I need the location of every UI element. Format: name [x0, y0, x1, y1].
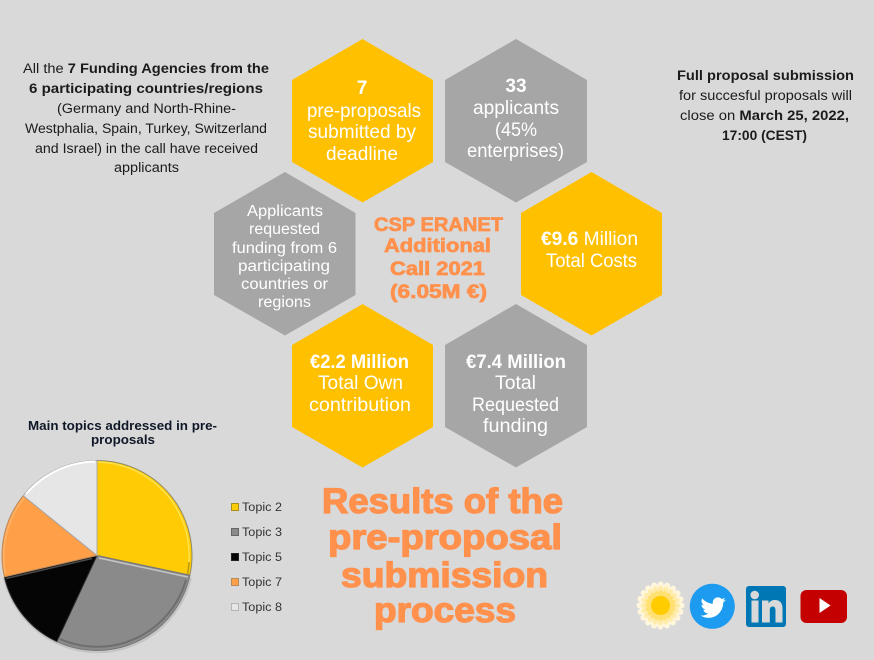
- text block: funding agencies: (Germany and North-Rhine-: [57, 101, 236, 116]
- hexagon: requested funding: Requested: [472, 395, 559, 416]
- text block: full proposal submission: Full proposal submission: [677, 68, 854, 83]
- hexagon: requested funding: [445, 304, 587, 468]
- hexagon: applicants: enterprises): [467, 141, 564, 162]
- legend: [232, 502, 282, 614]
- title: pre-proposal: [328, 518, 562, 557]
- center heading: call name: CSP ERANET: [374, 215, 503, 236]
- hexagon: participating countries: [214, 172, 356, 336]
- slice: topic 2: [97, 460, 192, 575]
- text block: funding agencies: [23, 61, 270, 175]
- hexagon: requested funding: €7.4 Million: [466, 352, 566, 373]
- hexagon: applicants: [445, 39, 587, 202]
- slice: topic 8: [23, 460, 97, 556]
- hexagon: applicants: applicants: [473, 98, 559, 119]
- chart title: proposals: [91, 432, 155, 447]
- text block: funding agencies: and Israel) in the call have received: [35, 141, 258, 156]
- icon: youtube: [800, 590, 847, 623]
- hexagon: participating countries: funding from 6: [232, 240, 337, 257]
- hexagon: total costs: €9.6 Million: [541, 229, 638, 250]
- title: process: [374, 591, 516, 630]
- hexagon: total costs: [521, 172, 662, 336]
- text block: full proposal submission: [677, 68, 854, 143]
- soft shadow under pie: [4, 578, 191, 652]
- pie chart: main topics: [2, 460, 192, 652]
- hexagon: requested funding: Total: [495, 373, 536, 394]
- chart title: Main topics addressed in pre-: [28, 418, 217, 433]
- hexagon: pre-proposals: 7: [357, 78, 367, 99]
- slice: topic 7: [2, 496, 97, 577]
- hexagon: participating countries: Applicants: [247, 203, 323, 220]
- hexagon: pre-proposals: deadline: [326, 144, 398, 165]
- hexagon: participating countries: requested: [249, 221, 320, 238]
- hexagon: pre-proposals: [292, 39, 433, 202]
- icon: sun logo: [640, 584, 682, 626]
- hexagon: pre-proposals: pre-proposals: [307, 101, 421, 122]
- center heading: call name: Additional: [384, 236, 491, 257]
- title: submission: [341, 556, 548, 595]
- hexagon: applicants: (45%: [495, 120, 537, 141]
- hexagon: own contribution: Total Own: [318, 373, 403, 394]
- hexagon: pre-proposals: submitted by: [308, 122, 416, 143]
- icon: linkedin: [746, 586, 786, 627]
- hexagon: participating countries: participating: [238, 258, 330, 275]
- legend: Topic 2: [242, 502, 282, 514]
- hexagon: requested funding: funding: [483, 416, 548, 437]
- center heading: call name: (6.05M €): [390, 282, 487, 303]
- hexagon: participating countries: regions: [258, 294, 311, 311]
- hexagon: own contribution: €2.2 Million: [310, 352, 409, 373]
- hexagon: own contribution: [292, 304, 433, 468]
- legend: Topic 3: [242, 527, 282, 539]
- center heading: call name: [374, 215, 503, 303]
- title: [322, 482, 563, 630]
- text block: full proposal submission: 17:00 (CEST): [722, 128, 807, 143]
- slice: topic 3: [57, 556, 190, 651]
- hexagon: participating countries: countries or: [241, 276, 328, 293]
- text block: funding agencies: Westphalia, Spain, Turkey, Switzerland: [25, 121, 267, 136]
- text block: full proposal submission: close on March 25, 2022,: [680, 108, 849, 123]
- center heading: call name: Call 2021: [390, 259, 485, 280]
- legend: Topic 7: [242, 577, 282, 589]
- chart title: [28, 418, 217, 447]
- text block: funding agencies: 6 participating countries/regions: [29, 81, 263, 96]
- hexagon: total costs: Total Costs: [546, 251, 637, 272]
- hexagon: applicants: 33: [505, 76, 527, 97]
- title: Results of the: [322, 482, 563, 521]
- text block: funding agencies: applicants: [114, 160, 179, 175]
- text block: full proposal submission: for succesful proposals will: [679, 88, 852, 103]
- hexagon: own contribution: contribution: [309, 395, 411, 416]
- legend: Topic 5: [242, 552, 282, 564]
- legend: Topic 8: [242, 602, 282, 614]
- icon: twitter: [690, 584, 735, 629]
- slice: topic 5: [4, 556, 97, 642]
- text block: funding agencies: All the 7 Funding Agencies from the: [23, 61, 270, 76]
